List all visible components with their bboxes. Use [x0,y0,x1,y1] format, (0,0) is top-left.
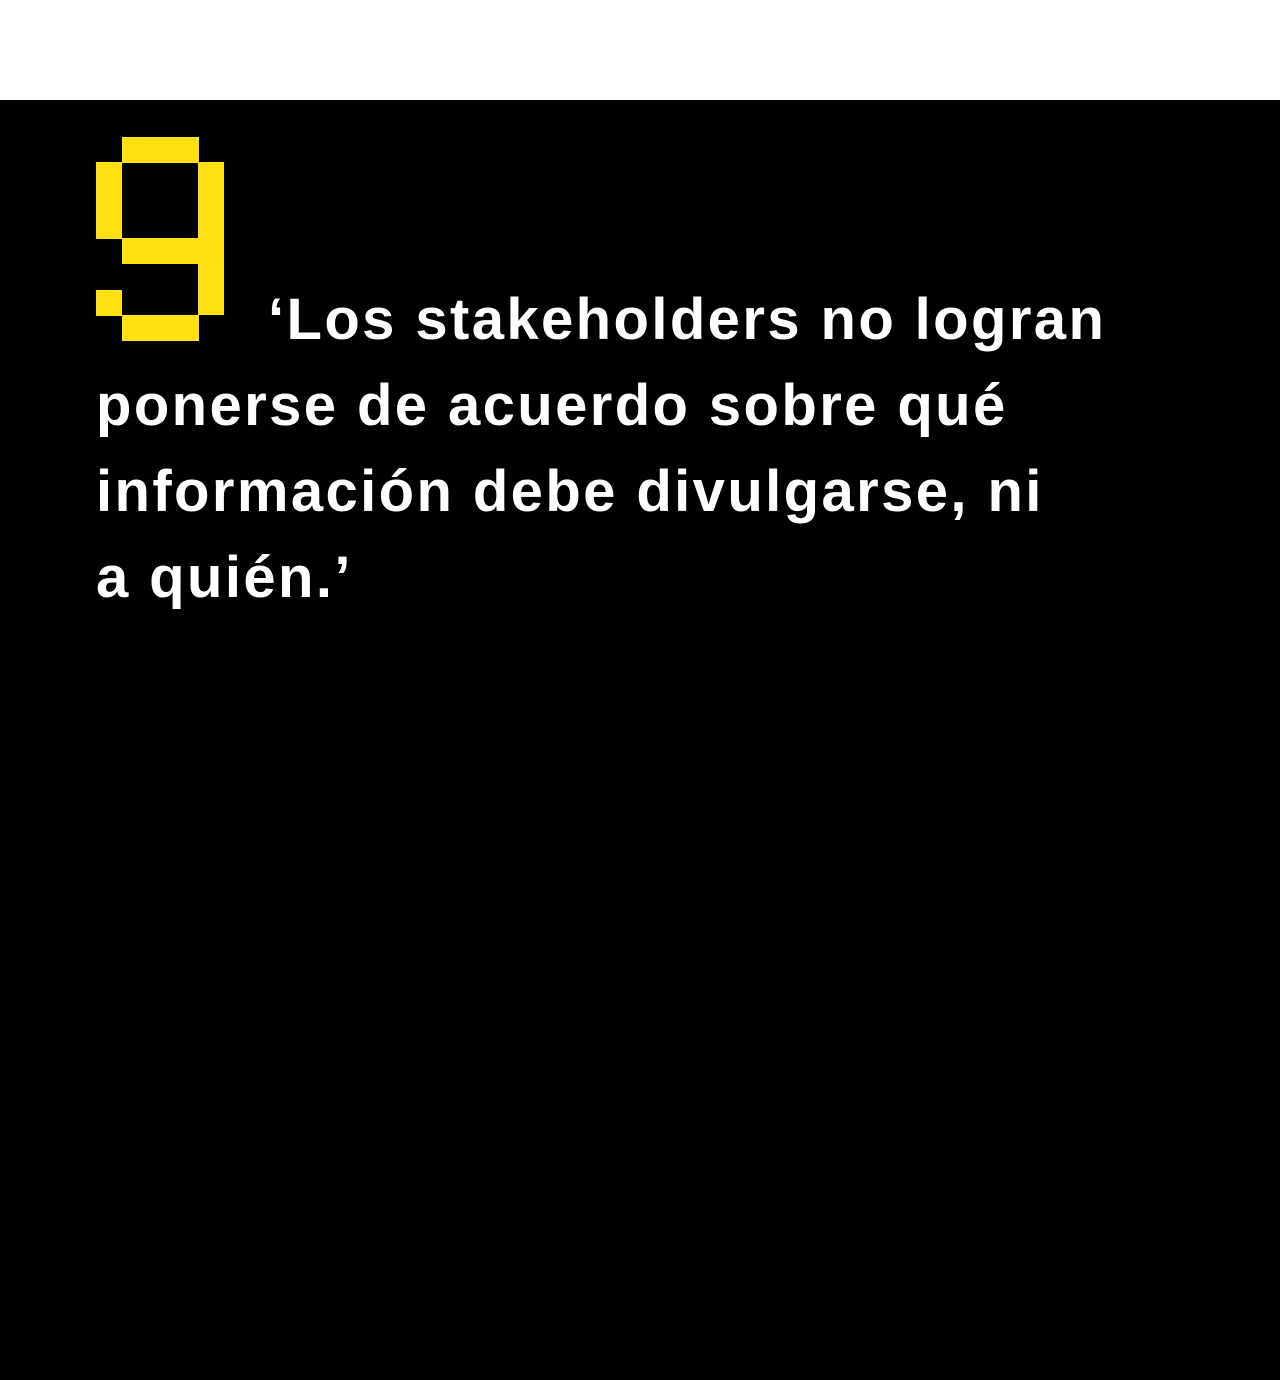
icon: pixel number 9 [96,137,224,341]
quote text: ponerse de acuerdo sobre qué [96,373,1008,438]
quote text: información debe divulgarse, ni [96,459,1044,524]
quote text: ‘Los stakeholders no logran [268,287,1106,352]
quote text [96,287,1106,610]
quote text: a quién.’ [96,545,353,610]
